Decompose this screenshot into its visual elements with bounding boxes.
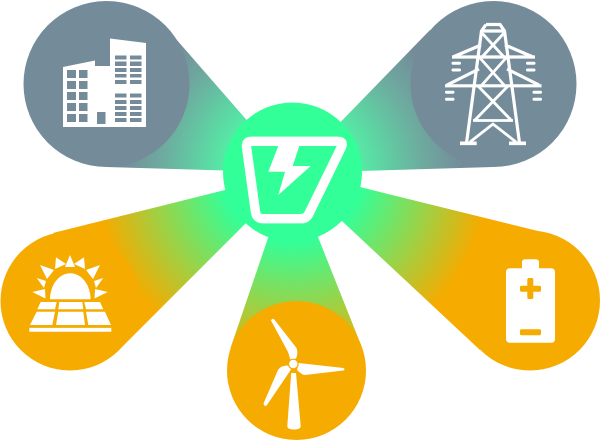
beam: battery to hub xyxy=(292,172,546,350)
icon: transmission tower xyxy=(445,24,542,143)
node: wind xyxy=(227,301,366,440)
icon: lightning shield logo xyxy=(246,141,342,219)
beam: pylon to hub xyxy=(292,30,493,172)
icon: solar panel with sun xyxy=(29,255,111,332)
beam: solar to hub xyxy=(53,172,292,347)
hub: central logo xyxy=(223,102,362,242)
node: pylon xyxy=(410,1,576,167)
node: battery xyxy=(460,230,600,370)
icon: wind turbine xyxy=(264,319,344,430)
node: buildings xyxy=(24,1,190,167)
beam: buildings to hub xyxy=(106,39,292,172)
icon: battery xyxy=(506,259,555,343)
icon: office buildings xyxy=(63,38,146,127)
beam: wind to hub xyxy=(230,172,361,348)
node: solar xyxy=(0,232,140,370)
